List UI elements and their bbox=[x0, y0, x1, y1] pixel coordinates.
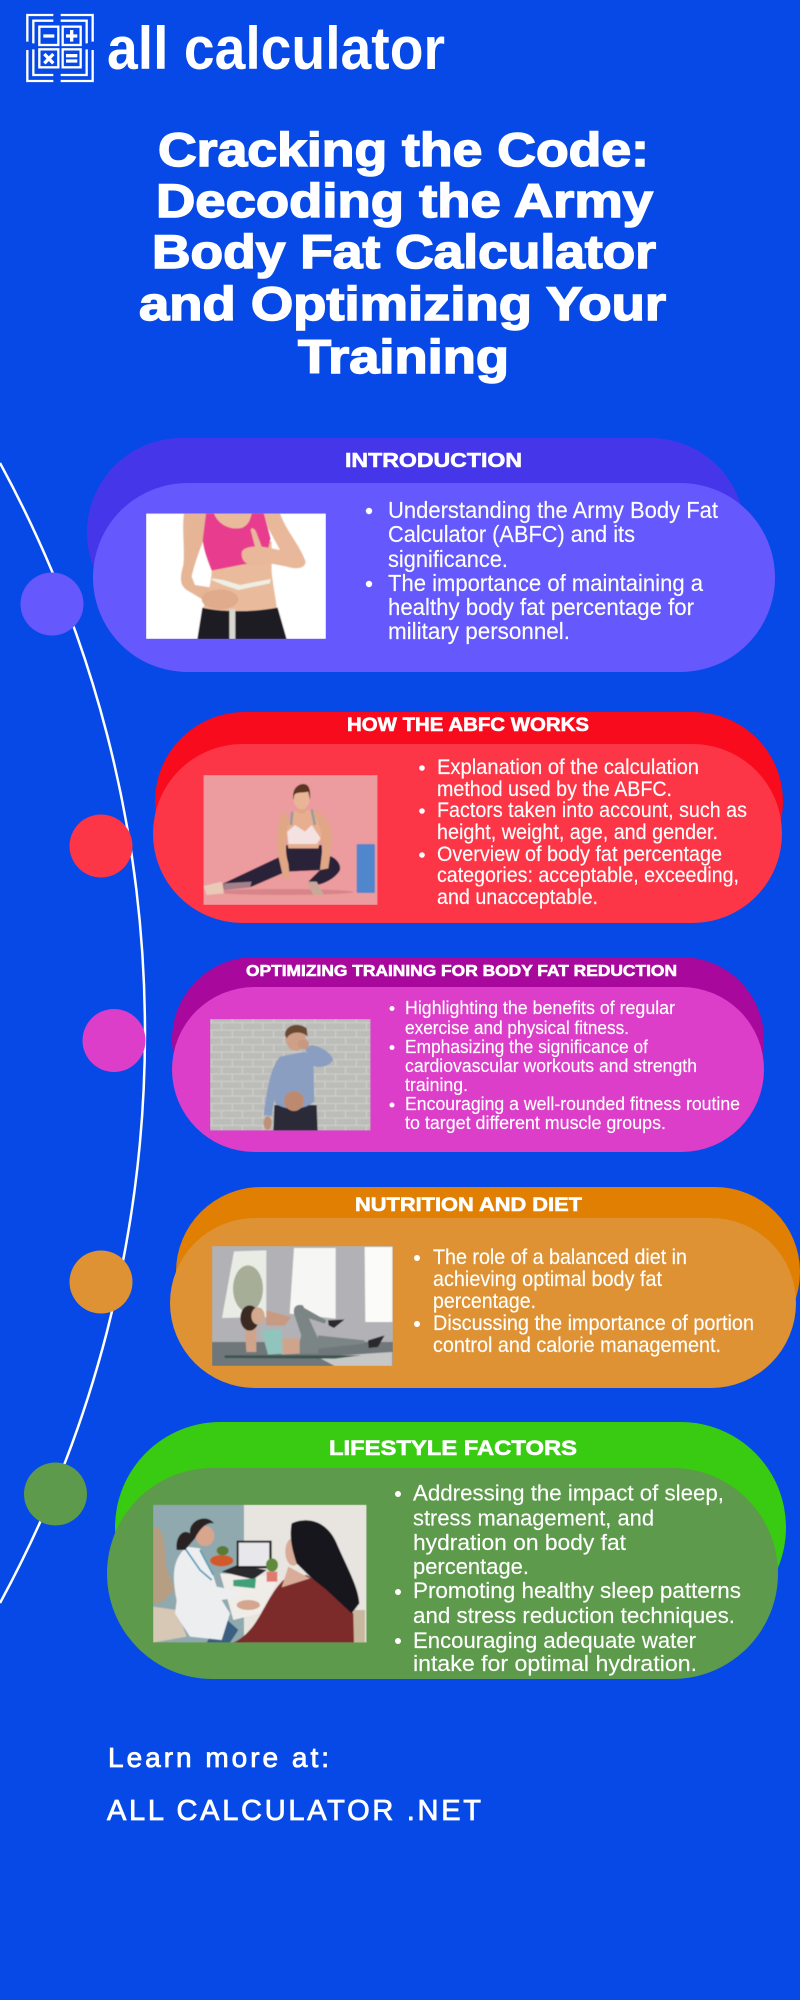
panel: how the ABFC works bbox=[70, 712, 783, 923]
bullet list: introduction: healthy body fat percentage for bbox=[388, 594, 694, 620]
bullet list: how the ABFC works: categories: acceptable, exceeding, bbox=[437, 864, 739, 887]
footer: learn more: ALL CALCULATOR .NET bbox=[107, 1795, 481, 1827]
heading: introduction: INTRODUCTION bbox=[345, 450, 522, 472]
bullet list: how the ABFC works: Factors taken into account, such as bbox=[437, 799, 747, 822]
title: Body Fat Calculator bbox=[152, 225, 656, 278]
bullet list: introduction: Calculator (ABFC) and its bbox=[388, 521, 635, 547]
footer: learn more: Learn more at: bbox=[108, 1742, 329, 1773]
bullet list: lifestyle factors: Encouraging adequate water bbox=[413, 1628, 696, 1653]
back pill: how the ABFC works bbox=[155, 712, 783, 891]
heading: nutrition and diet: NUTRITION AND DIET bbox=[355, 1194, 582, 1216]
heading: how the ABFC works: HOW THE ABFC WORKS bbox=[347, 714, 589, 736]
bullet list: how the ABFC works: and unacceptable. bbox=[437, 886, 598, 909]
panel: optimizing training bbox=[82, 957, 764, 1152]
front pill: nutrition and diet bbox=[170, 1218, 796, 1388]
title bbox=[139, 123, 666, 383]
bullet list: lifestyle factors: stress management, and bbox=[413, 1506, 654, 1530]
timeline dot: introduction bbox=[20, 572, 84, 636]
bullet list: nutrition and diet bbox=[414, 1246, 754, 1357]
bullet list: how the ABFC works: method used by the ABFC. bbox=[437, 778, 672, 801]
bullet list: optimizing training: training. bbox=[405, 1074, 468, 1095]
front pill: lifestyle factors bbox=[107, 1468, 778, 1679]
logo bbox=[27, 15, 445, 82]
heading: optimizing training: OPTIMIZING TRAINING FOR BODY FAT REDUCTION bbox=[246, 963, 677, 980]
title: and Optimizing Your bbox=[139, 277, 666, 330]
bullet list: optimizing training: Encouraging a well-rounded fitness routine bbox=[405, 1093, 740, 1114]
footer: learn more bbox=[107, 1742, 481, 1827]
bullet list: optimizing training: exercise and physical fitness. bbox=[405, 1017, 629, 1038]
front pill: optimizing training bbox=[172, 987, 764, 1152]
bullet list: lifestyle factors: Addressing the impact of sleep, bbox=[413, 1480, 724, 1506]
bullet list: optimizing training bbox=[390, 997, 740, 1133]
bullet list: lifestyle factors bbox=[395, 1480, 741, 1676]
panel: nutrition and diet bbox=[70, 1187, 800, 1388]
bullet list: introduction: The importance of maintaining a bbox=[388, 570, 704, 596]
bullet list: lifestyle factors: intake for optimal hydration. bbox=[413, 1651, 697, 1676]
heading: lifestyle factors: LIFESTYLE FACTORS bbox=[329, 1437, 577, 1460]
bullet list: lifestyle factors: hydration on body fat bbox=[413, 1530, 627, 1555]
logo wordmark: all calculator bbox=[107, 15, 445, 82]
timeline dot: optimizing training bbox=[82, 1009, 146, 1072]
back pill: introduction bbox=[87, 438, 745, 627]
bullet list: nutrition and diet: achieving optimal body fat bbox=[433, 1268, 662, 1291]
back pill: lifestyle factors bbox=[115, 1422, 786, 1633]
bullet list: optimizing training: cardiovascular workouts and strength bbox=[405, 1055, 697, 1076]
bullet list: optimizing training: Emphasizing the significance of bbox=[405, 1036, 649, 1057]
icon: calculator bbox=[27, 15, 93, 81]
title: Training bbox=[298, 330, 509, 383]
photo: woman doing crunches bbox=[212, 1246, 393, 1366]
bullet list: lifestyle factors: percentage. bbox=[413, 1554, 529, 1579]
photo: woman measuring waist bbox=[146, 513, 326, 639]
bullet list: introduction: Understanding the Army Body Fat bbox=[388, 497, 718, 523]
bullet list: how the ABFC works: Explanation of the calculation bbox=[437, 756, 699, 779]
bullet list: nutrition and diet: Discussing the importance of portion bbox=[433, 1312, 754, 1335]
photo: doctor consultation bbox=[153, 1505, 367, 1643]
back pill: optimizing training bbox=[172, 957, 764, 1122]
front pill: how the ABFC works bbox=[153, 744, 782, 923]
bullet list: introduction bbox=[366, 497, 718, 644]
bullet list: nutrition and diet: The role of a balanced diet in bbox=[433, 1246, 687, 1269]
timeline dot: how the ABFC works bbox=[70, 814, 132, 878]
timeline curve bbox=[0, 463, 145, 1603]
bullet list: introduction: military personnel. bbox=[388, 618, 570, 644]
panel: introduction bbox=[20, 438, 775, 672]
photo: man with tight shirt bbox=[210, 1019, 371, 1131]
title: Decoding the Army bbox=[156, 174, 653, 227]
bullet list: nutrition and diet: control and calorie management. bbox=[433, 1334, 721, 1357]
front pill: introduction bbox=[93, 483, 775, 672]
back pill: nutrition and diet bbox=[176, 1187, 800, 1357]
timeline dot: nutrition and diet bbox=[70, 1250, 132, 1314]
bullet list: lifestyle factors: Promoting healthy sleep patterns bbox=[413, 1578, 741, 1603]
bullet list: optimizing training: Highlighting the benefits of regular bbox=[405, 997, 675, 1018]
bullet list: how the ABFC works: height, weight, age, and gender. bbox=[437, 821, 718, 844]
timeline dot: lifestyle factors bbox=[24, 1462, 87, 1526]
bullet list: optimizing training: to target different muscle groups. bbox=[405, 1112, 666, 1133]
bullet list: how the ABFC works: Overview of body fat percentage bbox=[437, 843, 722, 866]
title: Cracking the Code: bbox=[158, 123, 649, 176]
bullet list: introduction: significance. bbox=[388, 546, 508, 572]
bullet list: how the ABFC works bbox=[419, 756, 747, 909]
bullet list: lifestyle factors: and stress reduction techniques. bbox=[413, 1603, 735, 1628]
photo: woman stretching bbox=[203, 775, 378, 905]
panel: lifestyle factors bbox=[24, 1422, 786, 1679]
bullet list: nutrition and diet: percentage. bbox=[433, 1290, 536, 1313]
